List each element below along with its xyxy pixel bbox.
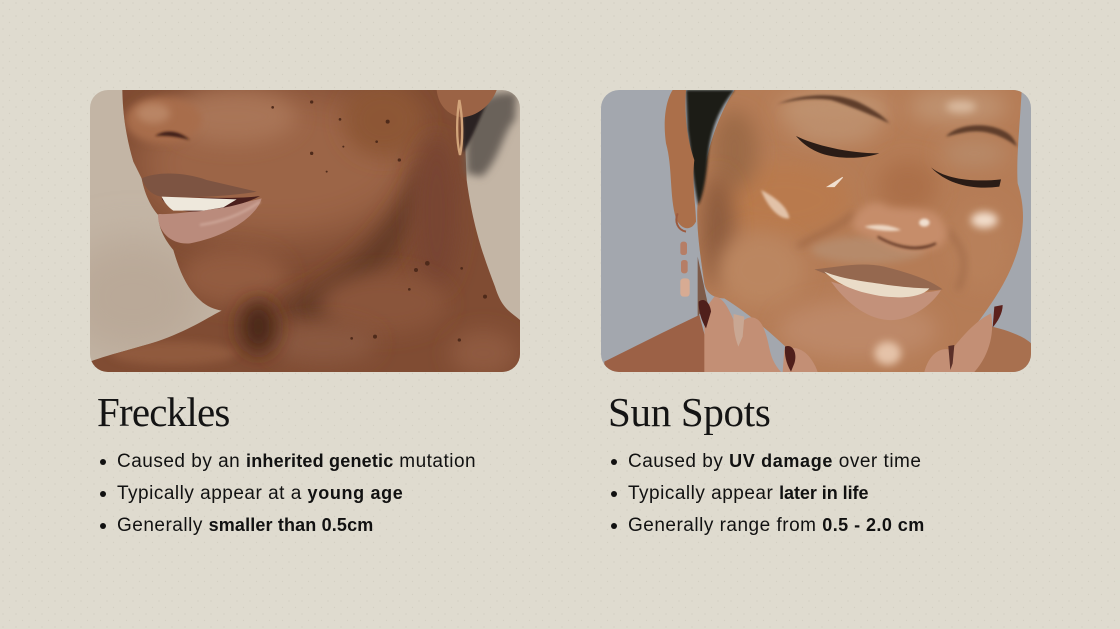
ear <box>437 90 497 117</box>
highlights <box>761 190 789 218</box>
eye: left <box>796 136 879 158</box>
panel: sun spots <box>601 90 1031 536</box>
eye: right <box>931 167 1001 188</box>
hands <box>704 297 781 372</box>
bullet 2: Typically appear at a young age <box>117 483 403 504</box>
eye sockets <box>798 128 870 147</box>
shoulder hollow <box>240 300 277 353</box>
nose <box>853 203 947 251</box>
earring <box>676 213 690 297</box>
bullet 3: Generally range from 0.5 - 2.0 cm <box>628 515 925 536</box>
bullet 1: Caused by an inherited genetic mutation <box>117 451 476 472</box>
earring <box>457 100 462 155</box>
smile fold <box>798 213 854 247</box>
teeth <box>824 272 929 297</box>
nails <box>699 300 711 328</box>
bullet list: sun spots <box>611 451 925 536</box>
face <box>697 90 1023 372</box>
hair <box>686 90 734 205</box>
bullet 3: Generally smaller than 0.5cm <box>117 515 373 536</box>
shoulders <box>604 315 714 372</box>
freckles <box>271 100 487 342</box>
jaw shadow <box>281 173 418 322</box>
photo: smiling woman with sun spots <box>601 90 1031 372</box>
panel: freckles <box>90 90 520 536</box>
heading: Sun Spots: Sun Spots <box>608 389 771 435</box>
hair <box>465 93 517 177</box>
lips <box>142 174 257 197</box>
bullet list: freckles <box>100 451 476 536</box>
ear <box>665 90 696 228</box>
bullet 1: Caused by UV damage over time <box>628 451 921 472</box>
teeth <box>162 196 260 212</box>
bullet 2: Typically appear later in life <box>628 483 868 504</box>
photo: freckles on jaw and neck <box>90 90 520 372</box>
heading: Freckles: Freckles <box>97 389 230 435</box>
mouth <box>814 265 943 290</box>
neck behind face <box>698 257 708 317</box>
nostril <box>155 132 190 140</box>
cheek glow <box>137 87 417 240</box>
eyebrows <box>778 95 889 123</box>
